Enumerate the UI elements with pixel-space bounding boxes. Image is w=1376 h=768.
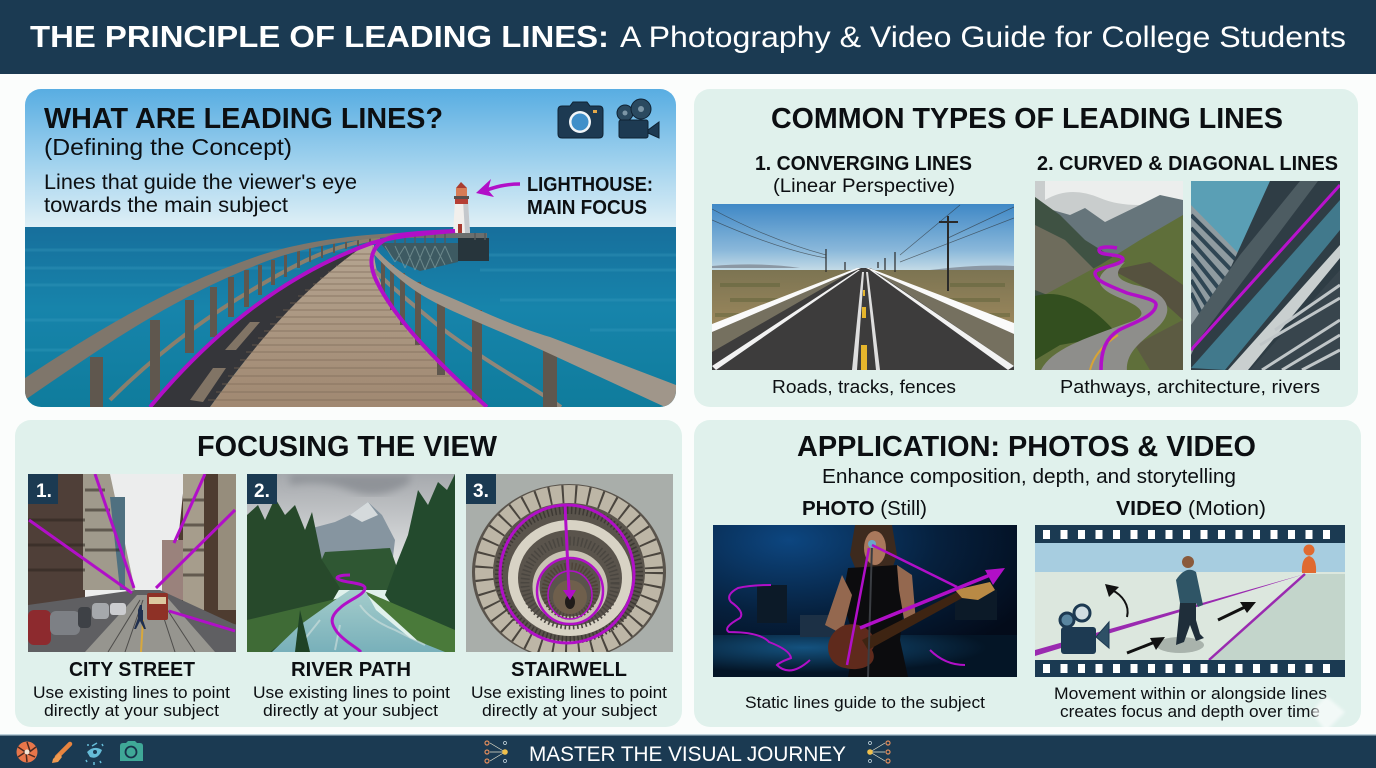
panel: what are leading lines xyxy=(25,89,676,407)
purple lines xyxy=(727,545,995,670)
caption: video: creates focus and depth over time xyxy=(1060,702,1320,721)
right rail xyxy=(372,245,676,407)
badge 2 xyxy=(247,474,277,504)
badge 2: 2. xyxy=(254,481,270,502)
guide lines xyxy=(1035,574,1305,656)
musician xyxy=(825,525,916,677)
film strips with perforations xyxy=(1035,525,1345,677)
caption: curved: Pathways, architecture, rivers xyxy=(1060,377,1320,397)
heading: WHAT ARE LEADING LINES? xyxy=(44,103,443,135)
title: THE PRINCIPLE OF LEADING LINES: xyxy=(30,19,609,54)
photo: diagonal architecture xyxy=(1191,181,1340,370)
subheading: curved and diagonal: 2. CURVED & DIAGONAL LINES xyxy=(1037,153,1338,175)
callout: lighthouse main focus: LIGHTHOUSE: xyxy=(527,174,653,196)
lighthouse xyxy=(453,182,470,233)
caption: city street: directly at your subject xyxy=(44,701,219,720)
icon: eye with sparks xyxy=(86,743,103,765)
badge 3: 3. xyxy=(473,481,489,502)
caption: stairwell xyxy=(471,659,667,720)
caption: converging: Roads, tracks, fences xyxy=(772,377,956,397)
photo: stairwell xyxy=(466,474,673,660)
shadow and walking man xyxy=(1156,556,1204,653)
mic stand xyxy=(868,545,872,677)
subheading: Enhance composition, depth, and storytelling xyxy=(822,466,1236,488)
photo: guitarist on stage xyxy=(713,525,1017,677)
deck planks xyxy=(208,245,487,407)
caption: river path: Use existing lines to point xyxy=(253,683,450,702)
caption: video xyxy=(1054,684,1327,721)
sea xyxy=(25,227,676,407)
heading: FOCUSING THE VIEW xyxy=(197,431,498,463)
film strip: video illustration xyxy=(1035,525,1345,677)
heading: COMMON TYPES OF LEADING LINES xyxy=(771,103,1283,135)
heading: APPLICATION: PHOTOS & VIDEO xyxy=(797,431,1256,463)
definition text: towards the main subject xyxy=(44,194,288,217)
footer tagline: MASTER THE VISUAL JOURNEY xyxy=(529,743,846,766)
callout: lighthouse main focus xyxy=(476,177,652,214)
caption: photo: Static lines guide to the subject xyxy=(745,693,985,712)
title: A Photography & Video Guide for College Students xyxy=(620,21,1346,54)
photo: river path xyxy=(247,474,455,652)
header banner xyxy=(0,0,1376,74)
photo: winding mountain road xyxy=(1035,181,1183,372)
purple leading lines xyxy=(150,231,487,407)
sky xyxy=(25,89,676,228)
panel: application xyxy=(694,420,1361,727)
badge 1 xyxy=(28,474,58,504)
caption: city street xyxy=(33,659,230,720)
shadowed underside xyxy=(152,250,357,407)
orange figure xyxy=(1302,544,1316,573)
subheading: converging lines: 1. CONVERGING LINES xyxy=(755,153,972,175)
label: video motion: VIDEO (Motion) xyxy=(1116,498,1266,520)
icon: photo camera xyxy=(558,102,603,138)
caption: stairwell: STAIRWELL xyxy=(511,659,627,681)
caption: stairwell: Use existing lines to point xyxy=(471,683,667,702)
icon: left network xyxy=(485,741,508,763)
far pier and arches xyxy=(380,233,489,271)
arrow xyxy=(476,179,520,197)
icon: paintbrush xyxy=(52,744,70,763)
caption: city street: Use existing lines to point xyxy=(33,683,230,702)
left rail behind xyxy=(25,232,420,407)
badge 1: 1. xyxy=(36,481,52,502)
subheading: converging lines xyxy=(755,153,972,197)
caption: video: Movement within or alongside lines xyxy=(1054,684,1327,703)
definition text xyxy=(44,171,357,217)
photo: straight road xyxy=(712,204,1014,370)
title xyxy=(30,19,1346,54)
panel: common types xyxy=(694,89,1358,407)
icon: video camera xyxy=(617,99,659,138)
pedestrian xyxy=(134,605,146,629)
caption: river path: directly at your subject xyxy=(263,701,438,720)
icon: video camera xyxy=(1060,605,1109,654)
badge 3 xyxy=(466,474,496,504)
caption: stairwell: directly at your subject xyxy=(482,701,657,720)
label: photo still: PHOTO (Still) xyxy=(802,498,927,520)
cars xyxy=(28,603,126,645)
footer banner xyxy=(0,734,1376,768)
caption: river path: RIVER PATH xyxy=(291,659,411,681)
subheading: (Defining the Concept) xyxy=(44,134,292,160)
icon: right network xyxy=(867,741,890,763)
sparkle watermark xyxy=(1311,696,1345,731)
panel: focusing the view xyxy=(15,420,682,727)
definition text: Lines that guide the viewer's eye xyxy=(44,171,357,194)
caption: city street: CITY STREET xyxy=(69,659,195,681)
subheading: converging lines: (Linear Perspective) xyxy=(773,176,955,197)
caption: river path xyxy=(253,659,450,720)
boardwalk xyxy=(25,231,676,407)
guitar xyxy=(828,582,995,669)
tram xyxy=(147,593,168,620)
icon: aperture xyxy=(16,742,38,762)
icon: teal camera xyxy=(120,741,143,761)
motion arrows xyxy=(1105,584,1256,653)
callout: lighthouse main focus: MAIN FOCUS xyxy=(527,197,647,219)
photo: city street xyxy=(28,474,236,652)
